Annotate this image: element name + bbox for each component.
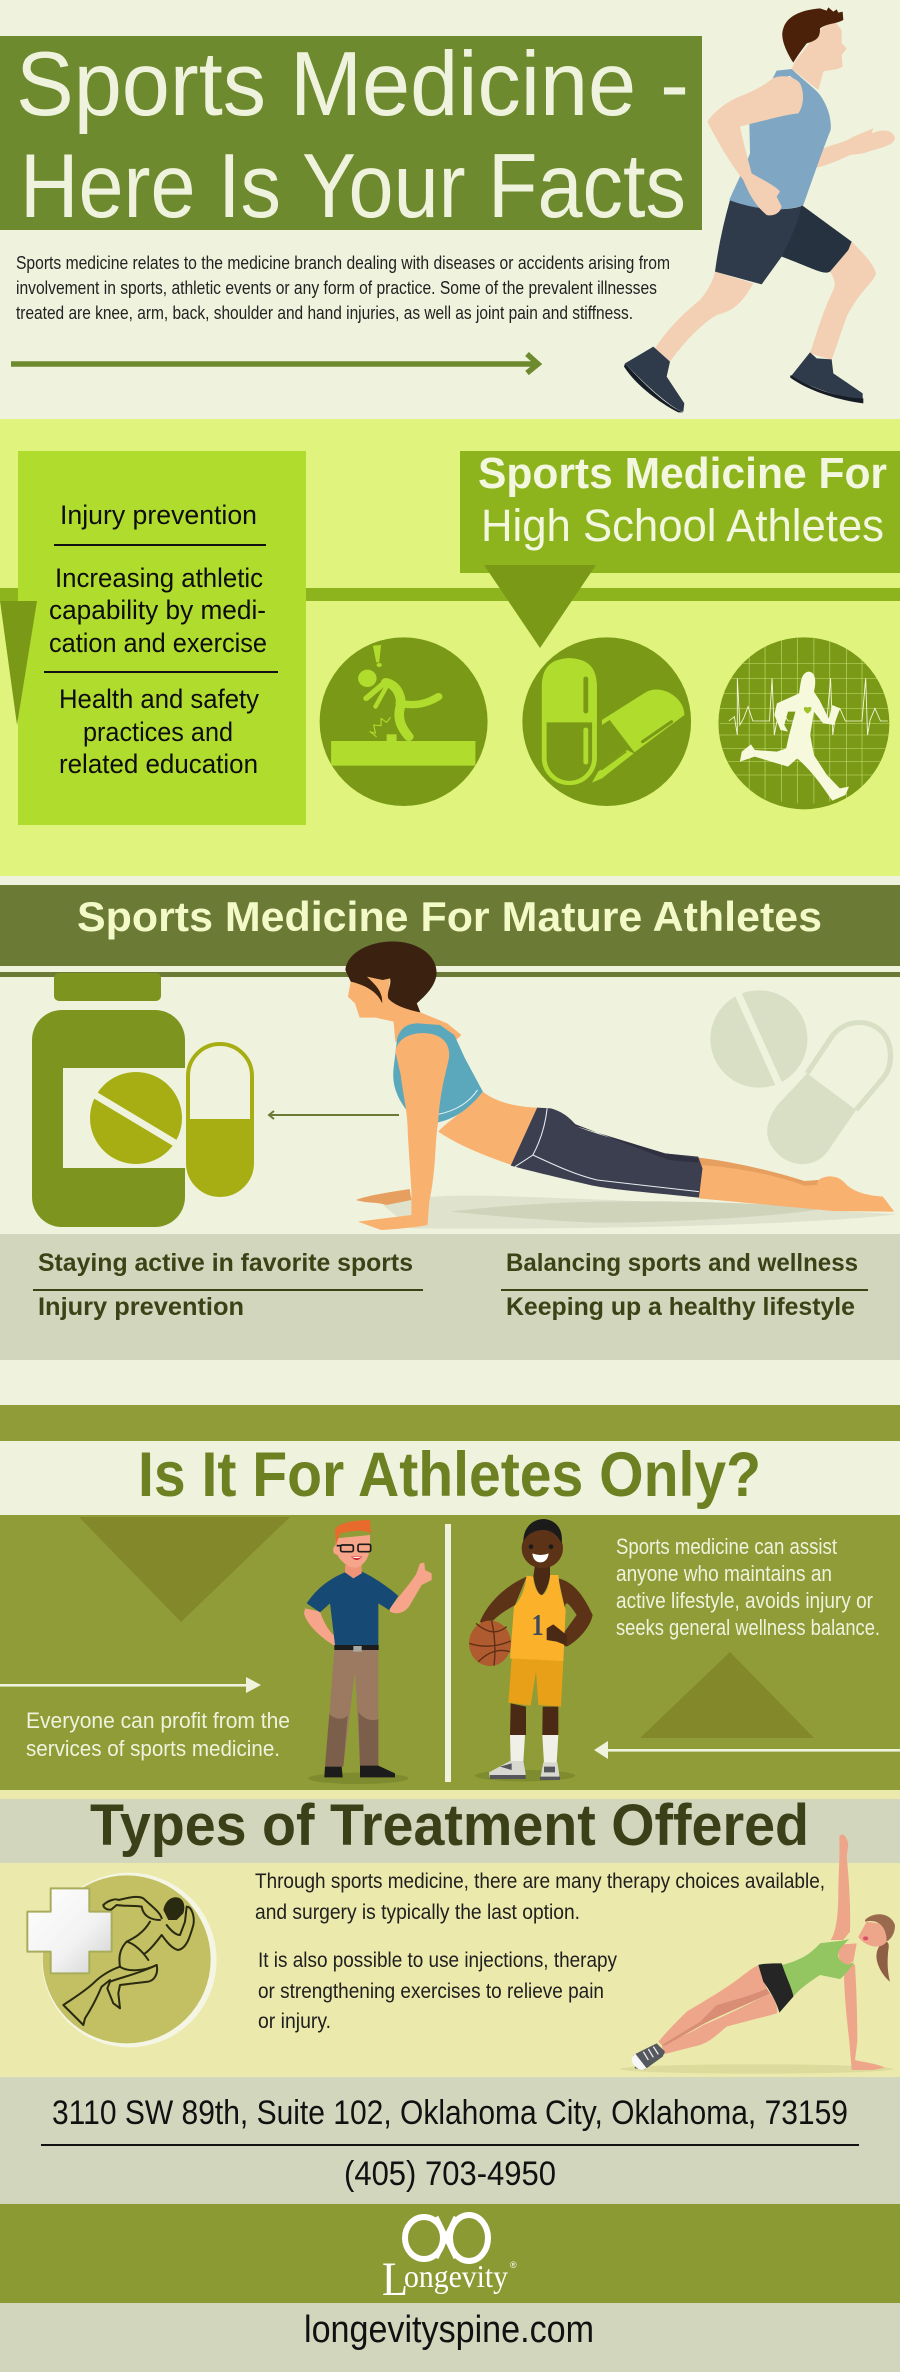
text: treatment 2 bbox=[258, 1949, 617, 2033]
arrow: intro bbox=[11, 354, 538, 373]
panel: website bbox=[0, 2303, 900, 2372]
text: everyone: Everyone can profit from the bbox=[26, 1708, 290, 1733]
intro text bbox=[16, 253, 670, 323]
heading: mature athletes: Sports Medicine For Mature Athletes bbox=[77, 893, 822, 940]
list box: cation and exercise bbox=[49, 628, 267, 658]
triangle centre bbox=[484, 565, 596, 648]
text: everyone: services of sports medicine. bbox=[26, 1736, 280, 1761]
triangle left bbox=[0, 601, 37, 725]
website: longevityspine.com bbox=[304, 2309, 594, 2351]
panel: intro bbox=[0, 0, 900, 419]
panel: mature athletes list: Balancing sports and wellness bbox=[506, 1249, 858, 1277]
figure: man with glasses bbox=[304, 1520, 432, 1784]
list box: Increasing athletic bbox=[55, 563, 263, 593]
panel: mature athletes list: Keeping up a healthy lifestyle bbox=[506, 1293, 855, 1321]
text: sports medicine can assist: anyone who maintains an bbox=[616, 1561, 832, 1586]
triangle up bbox=[640, 1652, 814, 1738]
text: treatment 1 bbox=[255, 1870, 825, 1924]
panel: athletes only bbox=[0, 1405, 900, 1790]
phone: (405) 703-4950 bbox=[344, 2155, 556, 2193]
text: treatment 1: Through sports medicine, there are many therapy choices available, bbox=[255, 1870, 825, 1893]
text: treatment 2: or strengthening exercises to relieve pain bbox=[258, 1980, 604, 2003]
title: Here Is Your Facts bbox=[20, 136, 686, 237]
panel: mature athletes bbox=[0, 876, 900, 1405]
logo: longevity: L bbox=[382, 2253, 408, 2306]
text: treatment 2: It is also possible to use injections, therapy bbox=[258, 1949, 617, 1972]
heading: mature athletes bbox=[0, 885, 900, 977]
connector bar bbox=[0, 588, 900, 601]
arrow: to pills bbox=[269, 1111, 399, 1119]
icon: capsules bbox=[522, 637, 691, 806]
text: treatment 1: and surgery is typically the last option. bbox=[255, 1901, 580, 1924]
panel: high school athletes bbox=[0, 419, 900, 876]
icon: runner bbox=[624, 7, 895, 412]
heading: high school: High School Athletes bbox=[481, 500, 884, 551]
heading: high school: Sports Medicine For bbox=[478, 449, 887, 498]
figure: basketball player bbox=[469, 1519, 593, 1781]
heading: treatment: Types of Treatment Offered bbox=[90, 1793, 809, 1858]
triangle down bbox=[79, 1517, 290, 1622]
divider bbox=[445, 1524, 451, 1782]
figure: side plank woman bbox=[620, 1834, 895, 2074]
panel: mature athletes list bbox=[0, 1234, 900, 1360]
title: Sports Medicine - bbox=[16, 34, 689, 135]
text: treatment 2: or injury. bbox=[258, 2010, 331, 2033]
list box: Health and safety bbox=[59, 684, 259, 714]
arrow: left bbox=[594, 1741, 900, 1759]
logo: longevity bbox=[382, 2215, 517, 2306]
panel: mature athletes list: Injury prevention bbox=[38, 1293, 244, 1321]
panel: mature athletes list: Staying active in favorite sports bbox=[38, 1249, 413, 1277]
arrow: right bbox=[0, 1677, 261, 1693]
text: everyone bbox=[26, 1708, 290, 1761]
logo: longevity: ongevity bbox=[404, 2258, 508, 2294]
text: sports medicine can assist bbox=[616, 1534, 880, 1640]
heading: high school bbox=[460, 449, 900, 573]
divider line bbox=[41, 2144, 859, 2146]
icon: pill bottle bbox=[32, 973, 253, 1227]
list box: Injury prevention bbox=[60, 500, 257, 530]
icon: ecg runner bbox=[718, 637, 890, 809]
icon: faded pills bbox=[710, 990, 891, 1164]
list box: related education bbox=[59, 749, 258, 779]
intro text: involvement in sports, athletic events or any form of practice. Some of the prevalent illnesses bbox=[16, 278, 657, 298]
list box: capability by medi- bbox=[49, 595, 266, 625]
panel: contact bbox=[0, 2077, 900, 2204]
title bbox=[0, 34, 702, 237]
icon: injury bbox=[320, 637, 488, 806]
intro text: Sports medicine relates to the medicine branch dealing with diseases or accidents arising from bbox=[16, 253, 670, 273]
figure: yoga woman bbox=[345, 942, 897, 1230]
text: sports medicine can assist: Sports medicine can assist bbox=[616, 1534, 837, 1559]
heading: athletes only: Is It For Athletes Only? bbox=[138, 1440, 761, 1510]
panel: types of treatment bbox=[0, 1790, 900, 2077]
icon: medical badge bbox=[27, 1873, 217, 2047]
figure: basketball player: 1 bbox=[532, 1608, 544, 1642]
logo: longevity: ® bbox=[510, 2260, 517, 2270]
intro text: treated are knee, arm, back, shoulder and hand injuries, as well as joint pain and stiffness. bbox=[16, 303, 633, 323]
list box bbox=[18, 451, 306, 825]
list box: practices and bbox=[83, 717, 233, 747]
panel: logo band bbox=[0, 2204, 900, 2306]
